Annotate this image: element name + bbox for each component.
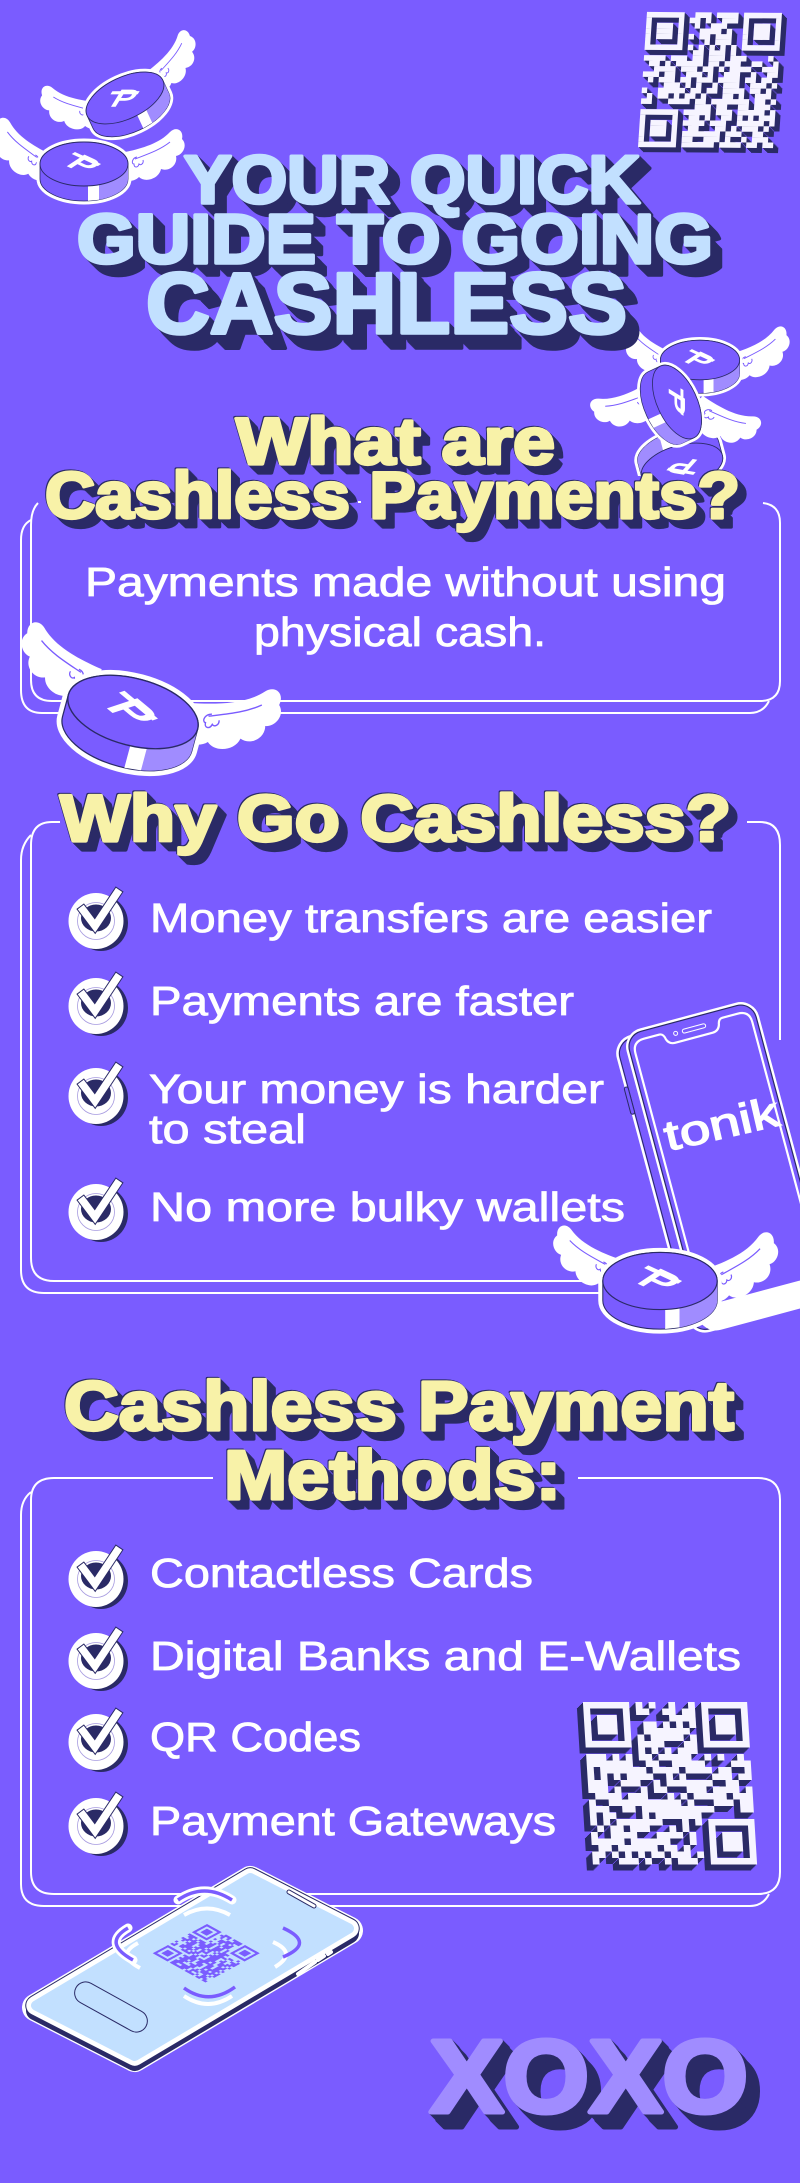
icon: coin stack third coin: [634, 435, 726, 476]
method item 4: [68, 1798, 556, 1856]
icon: large flying coin: P: [94, 693, 170, 731]
heading: what are cashless payments: Cashless Payments?: [45, 458, 740, 532]
icon: flying coin 1: [39, 27, 209, 148]
check item 3: Your money is harder: [149, 1066, 604, 1112]
icon: flying coin on phone: [548, 1224, 784, 1329]
method item 1: Contactless Cards: [150, 1550, 533, 1596]
check item 1: [68, 893, 712, 951]
icon: coin stack top coin: P: [677, 348, 721, 373]
title: YOUR QUICK: [184, 142, 640, 218]
icon: flying coin on phone: P: [628, 1263, 692, 1299]
check item 2: [68, 978, 574, 1036]
check item 4: [68, 1184, 625, 1242]
check item 3: [68, 1066, 604, 1152]
heading: why go cashless: Why Go Cashless?: [60, 781, 731, 855]
check item 4: No more bulky wallets: [150, 1184, 625, 1230]
method item 3: [68, 1714, 361, 1772]
icon: coin stack middle coin: [586, 358, 765, 461]
check item 2: Payments are faster: [150, 978, 574, 1024]
text: definition: Payments made without using: [85, 559, 726, 605]
text: definition: [85, 559, 726, 655]
check item 1: Money transfers are easier: [150, 895, 712, 941]
heading: cashless payment methods: Cashless Payment: [64, 1367, 734, 1445]
title: GUIDE TO GOING: [77, 200, 713, 278]
list: payment methods items: [68, 1550, 741, 1856]
title: CASHLESS: [146, 256, 627, 352]
method item 1: [68, 1550, 533, 1609]
title: [77, 142, 713, 352]
heading: what are cashless payments: What are: [236, 404, 555, 478]
icon: flying coin 1: P: [105, 85, 144, 112]
panel: payment methods frame: [21, 1478, 780, 1906]
check item 3: to steal: [149, 1106, 306, 1152]
panel: why go cashless frame: [21, 821, 780, 1293]
list: why go cashless items: [68, 893, 712, 1242]
icon: flying coin 2: [0, 116, 185, 201]
QR code top right: [638, 15, 782, 145]
phone with tonik logo: [610, 999, 800, 1337]
heading: what are cashless payments: [45, 404, 740, 532]
phone with tonik logo: tonik: [659, 1088, 784, 1160]
method item 4: Payment Gateways: [150, 1798, 556, 1844]
method item 3: QR Codes: [150, 1714, 361, 1760]
icon: coin stack top coin: [615, 321, 793, 393]
heading: cashless payment methods: [64, 1367, 734, 1514]
icon: flying coin 2: P: [59, 150, 108, 178]
text: definition: physical cash.: [254, 609, 546, 655]
QR code in methods panel: [586, 1702, 754, 1864]
icon: coin stack third coin: P: [661, 452, 704, 479]
icon: large flying coin: [12, 620, 286, 784]
method item 2: Digital Banks and E-Wallets: [150, 1633, 741, 1679]
method item 2: [68, 1633, 741, 1691]
XOXO sign-off: XOXO: [430, 2019, 748, 2134]
icon: coin stack middle coin: P: [663, 383, 689, 420]
panel: what are cashless payments frame: [21, 501, 780, 713]
heading: cashless payment methods: Methods:: [224, 1436, 561, 1514]
phone scanning QR code: [36, 1878, 349, 2061]
